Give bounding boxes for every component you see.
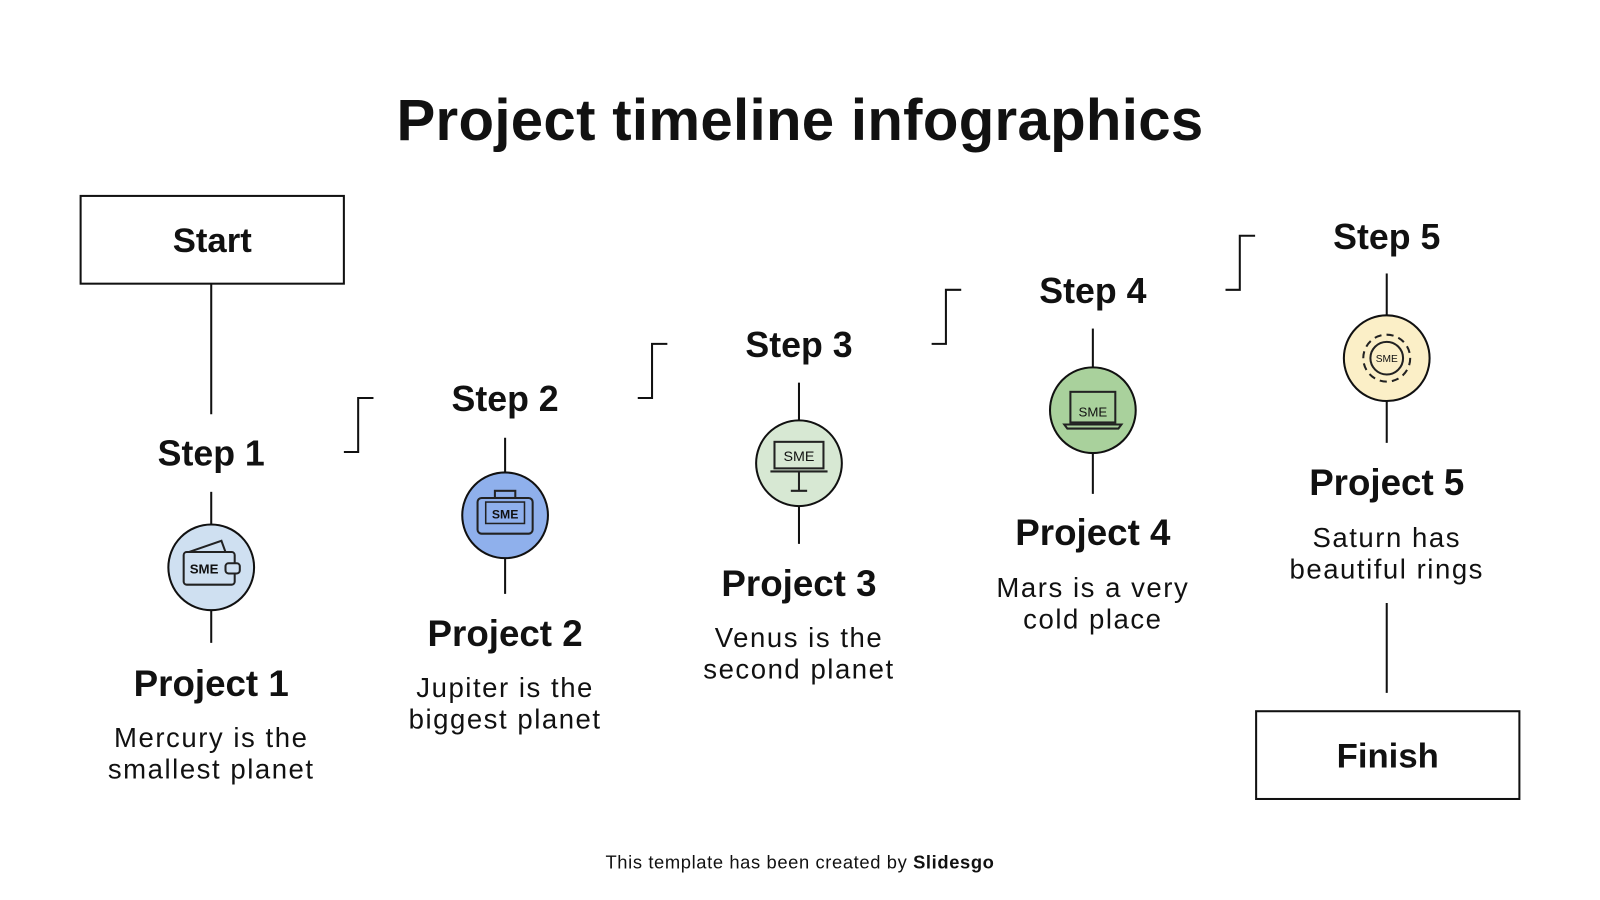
step 1 column: smallest planet [108,754,315,785]
icon: briefcase: SME [492,507,518,521]
icon: laptop: SME [1078,404,1107,419]
step 5 column: Project 5 [1309,462,1464,503]
step 1 column: Project 1 [134,663,289,704]
step 2 column: Project 2 [428,613,583,654]
footer: This template has been created by Slidesgo [605,851,995,872]
step 1 column [108,433,315,785]
step 2 column: Step 2 [452,379,559,419]
icon: billboard [756,420,842,506]
icon: wallet: SME [190,561,219,576]
step 2 column [409,379,602,735]
arrow: step connectors [344,236,1255,452]
step 4 column [996,271,1189,635]
step 1 column: Step 1 [158,433,265,473]
step 5 column: Step 5 [1333,217,1440,257]
icon: laptop [1050,367,1136,453]
icon: gear [1344,315,1430,401]
step 4 column: Step 4 [1039,271,1147,311]
step 3 column [703,325,895,685]
icon: briefcase [462,472,548,558]
title: Project timeline infographics [396,88,1204,153]
step 3 column: Project 3 [721,563,877,604]
step 3 column: second planet [703,654,895,685]
step 4 column: Project 4 [1015,512,1171,553]
finish box: Finish [1337,737,1439,775]
step 3 column: Venus is the [715,622,883,653]
icon: gear: SME [1376,354,1398,365]
step 2 column: biggest planet [409,704,602,735]
start box: Start [173,222,252,260]
finish connector [1386,603,1388,693]
finish box [1256,711,1519,799]
step 1 column: Mercury is the [114,722,308,753]
step 5 column: beautiful rings [1290,554,1484,585]
step 5 column: Saturn has [1312,522,1461,553]
start connector [210,284,212,414]
step 2 column: Jupiter is the [416,672,594,703]
icon: billboard: SME [784,449,814,465]
step 3 column: Step 3 [745,325,853,365]
step 4 column: cold place [1023,604,1163,635]
start box [81,196,344,284]
step 5 column [1290,217,1484,585]
icon: wallet [168,524,254,610]
step 4 column: Mars is a very [996,572,1189,603]
